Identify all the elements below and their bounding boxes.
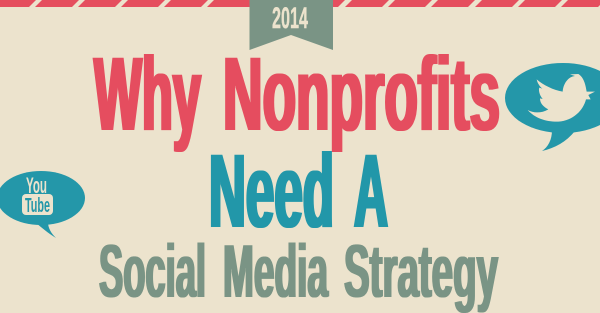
infographic header: A (354, 133, 388, 250)
title line 2: Need (209, 133, 334, 250)
title line 1 (94, 36, 500, 153)
ribbon year: 2014 (272, 2, 308, 35)
youtube "You" label: You (26, 173, 47, 198)
twitter bird (528, 74, 595, 122)
youtube "Tube" tile: Tube (25, 195, 50, 217)
icon: youtube speech bubble (0, 171, 85, 238)
icon: twitter speech bubble (505, 63, 600, 151)
title line 1: Why (94, 36, 201, 153)
title line 2 (209, 133, 388, 250)
title line 3: Social (99, 229, 206, 313)
ribbon badge: 2014 (250, 0, 333, 50)
striped top border (0, 0, 600, 7)
title line 3: Media (223, 229, 329, 313)
title line 3 (99, 229, 498, 313)
